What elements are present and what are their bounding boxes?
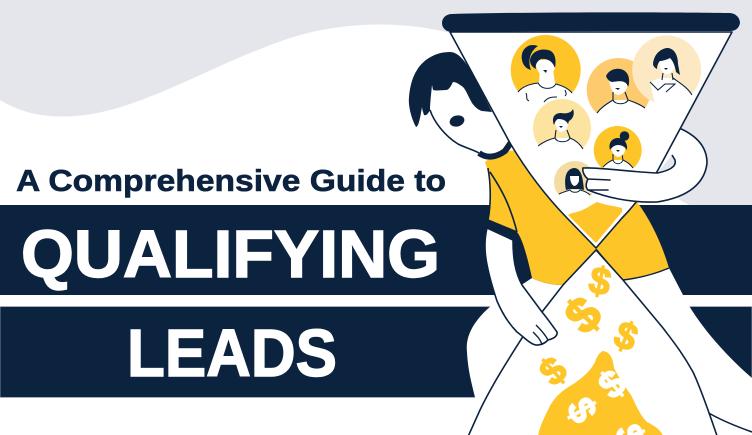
- band: bottom navy: [0, 306, 752, 398]
- shirt seam: [488, 168, 517, 232]
- person illustration and hourglass: [409, 12, 752, 435]
- shirt: left part: [485, 140, 600, 285]
- dollar 4: $: [532, 349, 576, 394]
- face outline: [430, 110, 479, 153]
- band: top navy: [0, 205, 752, 295]
- hair: [409, 52, 492, 127]
- right arm outline: [657, 128, 707, 202]
- hourglass top bar: [442, 12, 740, 32]
- portrait 2: short hair man: [587, 58, 651, 122]
- person body: [467, 250, 752, 435]
- dollar icons: [532, 259, 652, 435]
- finger lines: [533, 325, 548, 345]
- leg line: [707, 412, 752, 432]
- heading: leads: LEADS: [127, 316, 337, 391]
- dollar 3: $: [608, 313, 643, 360]
- eye: [448, 114, 466, 128]
- left arm and hand: [485, 228, 557, 345]
- hourglass glass: lower: [462, 250, 722, 435]
- shirt hem line: [623, 268, 669, 280]
- subtitle: A Comprehensive Guide to: [16, 163, 446, 198]
- portrait 1: ponytail woman: [511, 35, 581, 107]
- sand pile: [538, 351, 663, 435]
- finger lines: [583, 168, 657, 202]
- neck collar: [479, 141, 512, 157]
- dollar 6: $: [558, 391, 605, 430]
- grey gap between hourglass and arm: [658, 155, 675, 172]
- hand holding hourglass: [583, 168, 657, 202]
- shirt: right part: [596, 202, 669, 280]
- dollar 1: $: [585, 259, 614, 305]
- dollar 5: $: [591, 362, 635, 407]
- portrait 3: bob hair woman: [632, 36, 701, 105]
- hourglass glass: upper: [450, 32, 732, 248]
- right arm behind hourglass: [620, 128, 707, 202]
- dollar 2: $: [554, 286, 612, 344]
- portrait 5: bun woman: [594, 126, 642, 176]
- portrait 4: quiff man: [533, 99, 591, 157]
- background: grey sky: [0, 0, 752, 210]
- heading: qualifying: QUALIFYING: [21, 217, 440, 292]
- face: [430, 80, 520, 153]
- sand in upper bulb: [568, 202, 622, 243]
- portrait 6: long hair woman: [554, 161, 596, 205]
